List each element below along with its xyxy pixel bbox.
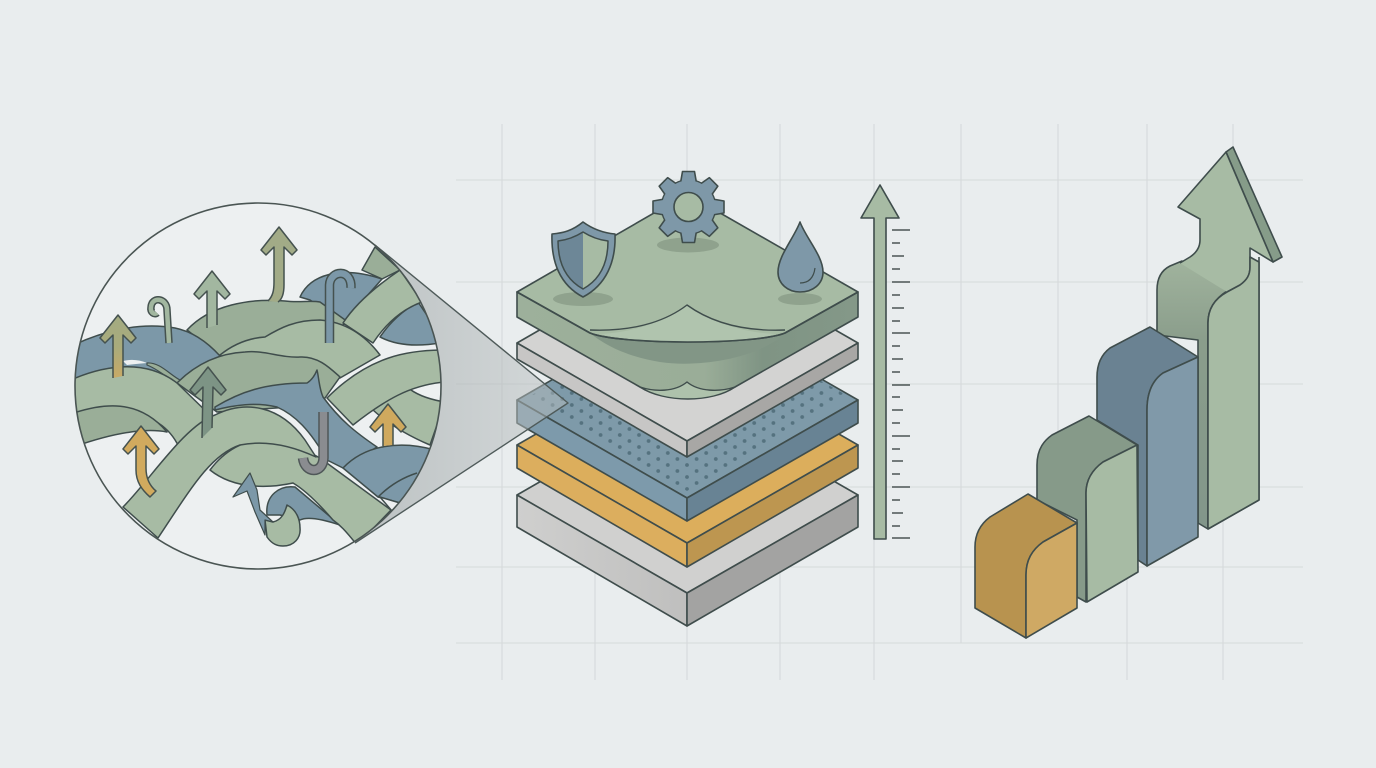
hook: small green	[151, 300, 169, 343]
arrow: dark green	[190, 367, 226, 438]
layer: orange slab	[517, 347, 858, 567]
lens outline	[75, 203, 441, 569]
magnifier cone	[355, 245, 568, 543]
icon: shield	[552, 222, 615, 297]
green bar	[1037, 416, 1138, 602]
lens background	[75, 203, 441, 569]
vertical arrow	[861, 185, 899, 539]
orange bar	[975, 494, 1077, 638]
arrow: orange right	[370, 404, 406, 446]
hook: blue	[330, 273, 351, 343]
wavy bands	[60, 247, 445, 546]
layer: bottom grey slab	[517, 397, 858, 626]
lens arrows	[100, 227, 406, 497]
scale arrow with ticks	[861, 185, 910, 539]
icon: gear	[653, 172, 724, 242]
layer: green top slab	[517, 194, 858, 399]
illustration canvas	[74, 124, 1303, 680]
growth bar chart	[975, 147, 1282, 638]
icon: water drop	[778, 222, 823, 292]
hook: grey J	[303, 412, 324, 470]
layer: light grey slab	[517, 245, 858, 457]
blue bar	[1097, 327, 1198, 566]
icon shadows on top slab	[553, 238, 822, 306]
arrow: orange left	[123, 426, 159, 497]
magnified circle	[60, 203, 445, 569]
background grid	[456, 124, 1303, 680]
layered stack	[517, 194, 858, 626]
arrow: pale green	[194, 271, 230, 328]
growth arrow bar	[1157, 147, 1282, 529]
layer: dotted blue slab	[517, 302, 858, 521]
arrow: olive tall	[261, 227, 297, 302]
tick marks	[892, 230, 910, 538]
arrow: olive to orange	[100, 315, 136, 378]
